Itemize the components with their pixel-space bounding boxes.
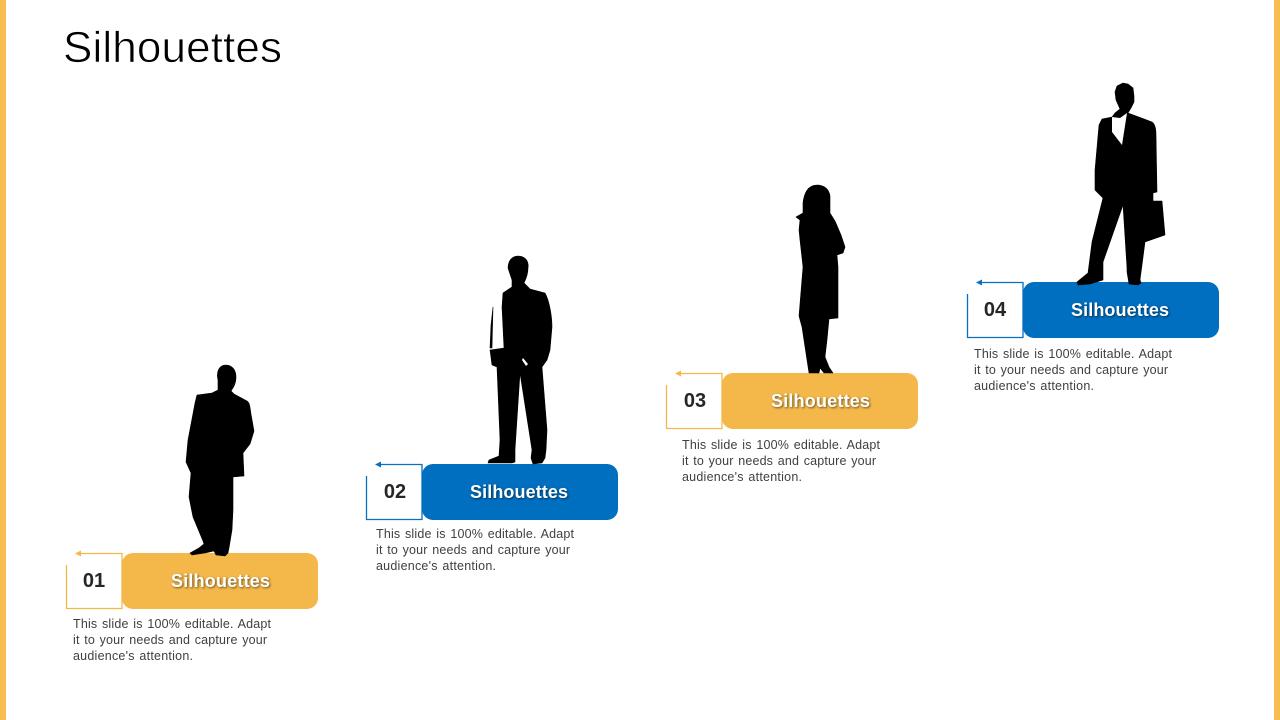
description 04: it to your needs and capture your <box>974 363 1168 377</box>
number box 01: 01 <box>83 570 105 592</box>
description 04: This slide is 100% editable. Adapt <box>974 347 1173 361</box>
silhouette: man with briefcase <box>1077 83 1165 285</box>
description 03 <box>682 438 881 484</box>
description 02: audience's attention. <box>376 559 496 573</box>
right edge bar <box>1274 0 1280 720</box>
silhouette: man standing <box>488 256 552 464</box>
description 01: This slide is 100% editable. Adapt <box>73 617 272 631</box>
title: Silhouettes <box>63 23 282 72</box>
label pill 01: Silhouettes <box>171 571 270 591</box>
number box 02 <box>366 462 422 520</box>
description 01 <box>73 617 272 663</box>
description 02: This slide is 100% editable. Adapt <box>376 527 575 541</box>
description 01: it to your needs and capture your <box>73 633 267 647</box>
step 02 <box>366 256 618 573</box>
silhouette: man with hand in pocket <box>186 365 254 556</box>
left edge bar <box>0 0 6 720</box>
label pill 01 <box>122 553 318 609</box>
description 04 <box>974 347 1173 393</box>
label pill 02 <box>422 464 618 520</box>
number box 02: 02 <box>384 481 406 503</box>
number box 03: 03 <box>684 390 706 412</box>
description 03: audience's attention. <box>682 470 802 484</box>
label pill 04: Silhouettes <box>1071 300 1169 320</box>
description 02 <box>376 527 575 573</box>
step 03 <box>666 185 918 484</box>
silhouette: woman <box>796 185 845 373</box>
label pill 04 <box>1023 282 1219 338</box>
description 01: audience's attention. <box>73 649 193 663</box>
number box 04: 04 <box>984 299 1007 321</box>
number box 01 <box>66 550 122 608</box>
number box 03 <box>666 370 722 428</box>
description 03: it to your needs and capture your <box>682 454 876 468</box>
step 04 <box>968 83 1219 393</box>
label pill 02: Silhouettes <box>470 482 568 502</box>
number box 04 <box>968 280 1023 338</box>
label pill 03: Silhouettes <box>771 391 870 411</box>
description 03: This slide is 100% editable. Adapt <box>682 438 881 452</box>
step 01 <box>66 365 318 663</box>
label pill 03 <box>722 373 918 429</box>
description 04: audience's attention. <box>974 379 1094 393</box>
description 02: it to your needs and capture your <box>376 543 570 557</box>
